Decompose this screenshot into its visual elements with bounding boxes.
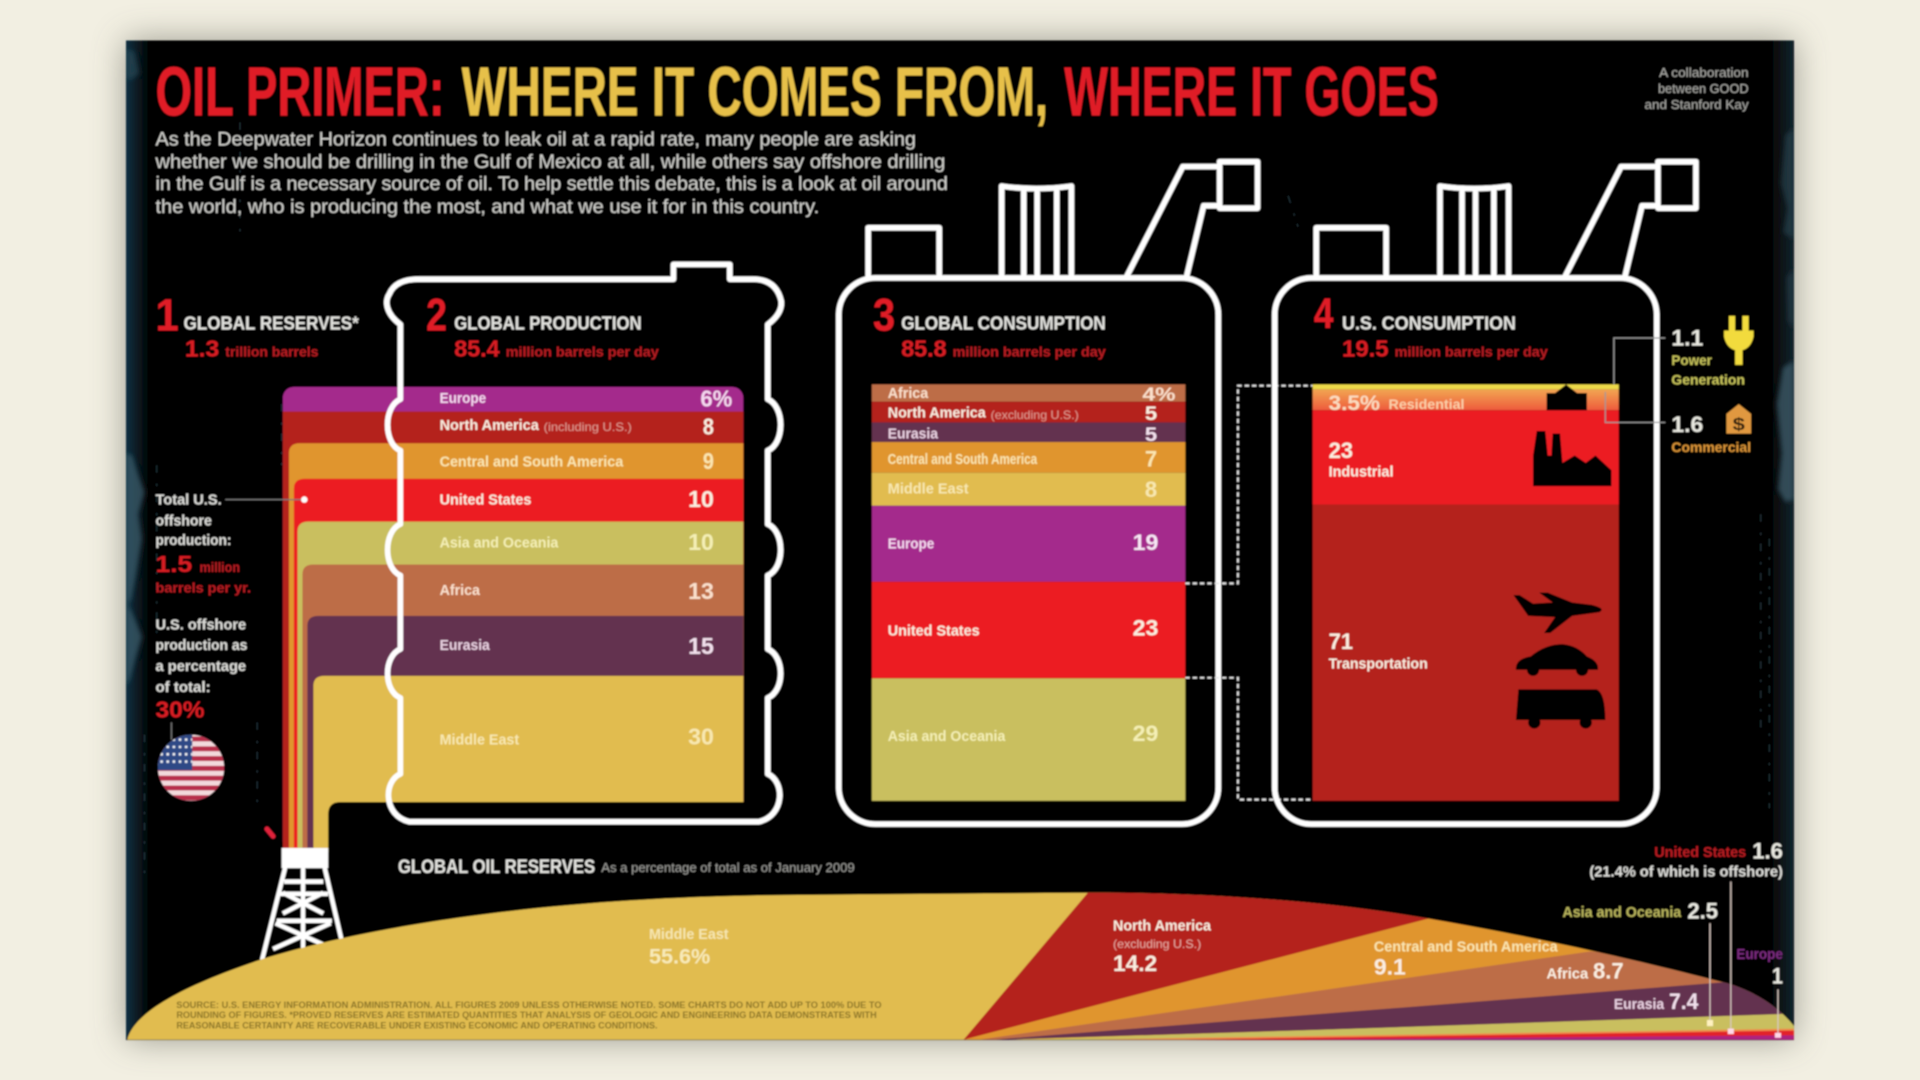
production row labels: 13 <box>688 578 714 604</box>
consumption stacked bars <box>872 384 1185 801</box>
consumption row labels: 7 <box>1145 447 1157 472</box>
production row labels: 15 <box>688 633 714 659</box>
icon: car <box>1516 644 1598 676</box>
consumption row labels: 19 <box>1133 530 1158 555</box>
heading: global consumption: million barrels per day <box>953 343 1106 359</box>
reserve labels: 8.7 <box>1593 958 1624 983</box>
left side notes: U.S. offshore production: of total: <box>156 680 211 696</box>
production row labels: 6% <box>700 386 733 412</box>
production row labels: 9 <box>703 448 714 474</box>
panel: global reserves and production streams <box>156 264 808 857</box>
reserve labels: Middle East <box>649 927 729 943</box>
U.S. row labels: Transportation <box>1329 657 1428 673</box>
icon: US flag globe <box>158 735 224 801</box>
callout: power generation <box>1671 316 1753 387</box>
icon: red drip mark <box>267 829 273 836</box>
left side notes: U.S. offshore production: 1.5 <box>156 551 192 577</box>
reserve labels: (excluding U.S.) <box>1113 938 1201 951</box>
icon: van <box>1516 689 1605 729</box>
reserve labels: 55.6% <box>649 946 710 969</box>
production row labels: Europe <box>440 391 486 407</box>
reserve labels <box>649 838 1783 1014</box>
U.S. row labels: 3.5% <box>1329 392 1380 415</box>
credit <box>1644 65 1749 112</box>
production row labels: 10 <box>688 529 714 555</box>
consumption row labels: Eurasia <box>888 426 939 442</box>
consumption can outline <box>839 162 1258 824</box>
heading: global oil reserves: GLOBAL OIL RESERVES <box>398 856 595 878</box>
heading: global reserves: 1.3 <box>185 335 219 361</box>
title: WHERE IT GOES <box>1064 53 1439 131</box>
heading: global consumption <box>873 290 1106 361</box>
heading: U.S. consumption: million barrels per day <box>1395 343 1548 359</box>
consumption row labels: (excluding U.S.) <box>991 408 1079 422</box>
left side notes: U.S. offshore production: production: <box>156 533 231 549</box>
left side notes: U.S. offshore production: million <box>200 560 240 575</box>
consumption row labels: United States <box>888 624 980 640</box>
source note <box>176 1000 882 1031</box>
production row labels: North America <box>440 418 540 434</box>
reserve labels: United States <box>1654 845 1746 861</box>
production row labels: Asia and Oceania <box>440 535 559 551</box>
production can outline <box>387 264 781 822</box>
title: WHERE IT COMES FROM, <box>462 53 1048 131</box>
production row labels: 10 <box>688 486 714 512</box>
heading: U.S. consumption: U.S. CONSUMPTION <box>1342 312 1516 333</box>
icon: oil derrick <box>262 848 342 960</box>
reserve labels: Europe <box>1736 947 1783 963</box>
U.S. row labels: Industrial <box>1329 464 1393 480</box>
heading: global production <box>426 290 659 361</box>
heading: global consumption: 3 <box>873 290 895 341</box>
left side notes: U.S. offshore production: offshore <box>156 513 212 529</box>
callout: commercial: Commercial <box>1671 439 1751 455</box>
production row labels: 30 <box>688 723 714 749</box>
left side notes: U.S. offshore production: a percentage <box>156 659 246 675</box>
credit: A collaboration <box>1659 65 1749 80</box>
heading: global consumption: GLOBAL CONSUMPTION <box>901 312 1106 333</box>
U.S. row labels: 23 <box>1329 438 1353 463</box>
callout: commercial <box>1671 404 1751 455</box>
icon: airplane <box>1513 593 1602 633</box>
icon: dollar building <box>1727 404 1751 433</box>
U.S. row labels: Residential <box>1389 397 1464 412</box>
callout: power generation: Power <box>1671 352 1712 368</box>
offshore callout line <box>171 496 307 740</box>
stacked production streams <box>283 387 808 857</box>
heading: global reserves: trillion barrels <box>225 343 319 359</box>
production row labels: United States <box>440 492 531 508</box>
U.S. can outline <box>1275 162 1696 824</box>
icon: house <box>1547 384 1587 410</box>
icon: factory <box>1533 431 1611 486</box>
callout: commercial: $ <box>1733 414 1746 434</box>
heading: U.S. consumption: 19.5 <box>1342 335 1389 361</box>
credit: and Stanford Kay <box>1644 97 1749 112</box>
reserve labels: 7.4 <box>1669 989 1699 1014</box>
heading: global reserves: 1 <box>156 290 179 341</box>
left side notes: U.S. offshore production <box>156 492 251 723</box>
reserve leader lines <box>1707 882 1781 1038</box>
reserve labels: Africa <box>1547 966 1589 982</box>
intro text block <box>154 130 948 218</box>
production row labels: Central and South America <box>440 455 624 471</box>
consumption row labels: North America <box>888 406 987 422</box>
reserve labels: 1 <box>1772 963 1783 988</box>
consumption row labels: Europe <box>888 537 934 553</box>
intro text block: As the Deepwater Horizon continues to leak oil at a rapid rate, many people are asking <box>156 130 916 151</box>
production row labels: Eurasia <box>440 638 491 654</box>
heading: global production: 85.4 <box>454 335 500 361</box>
power and commercial leader lines <box>1605 338 1665 422</box>
reserve labels: (21.4% of which is offshore) <box>1589 865 1783 881</box>
consumption row labels: 5 <box>1145 403 1157 425</box>
left side notes: U.S. offshore production: 30% <box>156 697 205 723</box>
consumption row labels: Middle East <box>888 481 969 497</box>
reserve labels: North America <box>1113 919 1212 935</box>
heading: global production: GLOBAL PRODUCTION <box>454 312 642 333</box>
title: OIL PRIMER: <box>156 53 444 131</box>
left side notes: U.S. offshore production: Total U.S. <box>156 492 222 508</box>
heading: global reserves <box>156 290 360 361</box>
heading: global oil reserves <box>398 856 855 878</box>
heading: U.S. consumption: 4 <box>1314 290 1334 338</box>
production row labels: (including U.S.) <box>544 420 632 434</box>
reserve labels: 9.1 <box>1374 955 1406 980</box>
U.S. row labels <box>1329 392 1464 673</box>
intro text block: the world, who is producing the most, and what we use it for in this country. <box>156 197 819 218</box>
source note: ROUNDING OF FIGURES. *PROVED RESERVES ARE ESTIMATED QUANTITIES THAT ANALYSIS OF GEOLOGIC AND ENGINEERING DATA DEMONSTRATES WITH <box>176 1010 877 1020</box>
panel: global consumption <box>839 162 1258 824</box>
heading: global production: 2 <box>426 290 447 341</box>
reserve labels: Central and South America <box>1374 939 1558 955</box>
heading: global consumption: 85.8 <box>901 335 947 361</box>
title <box>156 53 1439 131</box>
chart: global oil reserves dome <box>122 838 1800 1043</box>
consumption row labels <box>888 383 1176 746</box>
left side notes: U.S. offshore production: barrels per yr. <box>156 580 251 596</box>
reserve labels: 2.5 <box>1687 898 1718 923</box>
production row labels: 8 <box>703 414 714 440</box>
consumption row labels: 29 <box>1133 721 1158 746</box>
reserve labels: 1.6 <box>1752 838 1783 863</box>
consumption row labels: 5 <box>1145 424 1157 446</box>
reserve labels: Asia and Oceania <box>1562 905 1682 921</box>
production row labels: Middle East <box>440 732 519 748</box>
U.S. consumption stacked bars <box>1313 384 1619 801</box>
reserve labels: Eurasia <box>1614 997 1665 1013</box>
panel: U.S. consumption <box>122 162 1800 1043</box>
heading: global oil reserves: As a percentage of total as of January 2009 <box>601 860 855 875</box>
production row labels <box>440 386 733 749</box>
consumption row labels: Central and South America <box>888 452 1038 468</box>
U.S. row labels: 71 <box>1329 629 1353 654</box>
production row labels: Africa <box>440 583 481 599</box>
heading: global production: million barrels per day <box>506 343 659 359</box>
reserve labels: 14.2 <box>1113 951 1157 976</box>
heading: global reserves: GLOBAL RESERVES* <box>184 312 360 333</box>
callout: commercial: 1.6 <box>1671 412 1703 437</box>
callout: power generation: 1.1 <box>1671 325 1703 350</box>
icon: plug <box>1724 316 1753 365</box>
intro text block: whether we should be drilling in the Gulf of Mexico at all, while others say offshore drilling <box>154 152 945 173</box>
consumption row labels: Asia and Oceania <box>888 729 1006 745</box>
intro text block: in the Gulf is a necessary source of oil. To help settle this debate, this is a look at oil around <box>156 174 948 195</box>
consumption row labels: 8 <box>1145 477 1157 502</box>
consumption row labels: Africa <box>888 386 929 402</box>
left side notes: U.S. offshore production: production as <box>156 638 247 654</box>
consumption row labels: 4% <box>1142 383 1176 404</box>
dashed connector from U.S. share to U.S. can <box>1185 386 1313 800</box>
source note: SOURCE: U.S. ENERGY INFORMATION ADMINISTRATION. ALL FIGURES 2009 UNLESS OTHERWISE NOTED. SOME CHARTS DO NOT ADD UP TO 100% DUE TO <box>176 1000 882 1010</box>
source note: REASONABLE CERTAINTY ARE RECOVERABLE UNDER EXISTING ECONOMIC AND OPERATING CONDITIONS. <box>176 1021 658 1031</box>
credit: between GOOD <box>1658 81 1749 96</box>
left side notes: U.S. offshore production: U.S. offshore <box>156 617 246 633</box>
heading: U.S. consumption <box>1314 290 1548 361</box>
callout: power generation: Generation <box>1671 371 1745 387</box>
consumption row labels: 23 <box>1133 616 1158 641</box>
